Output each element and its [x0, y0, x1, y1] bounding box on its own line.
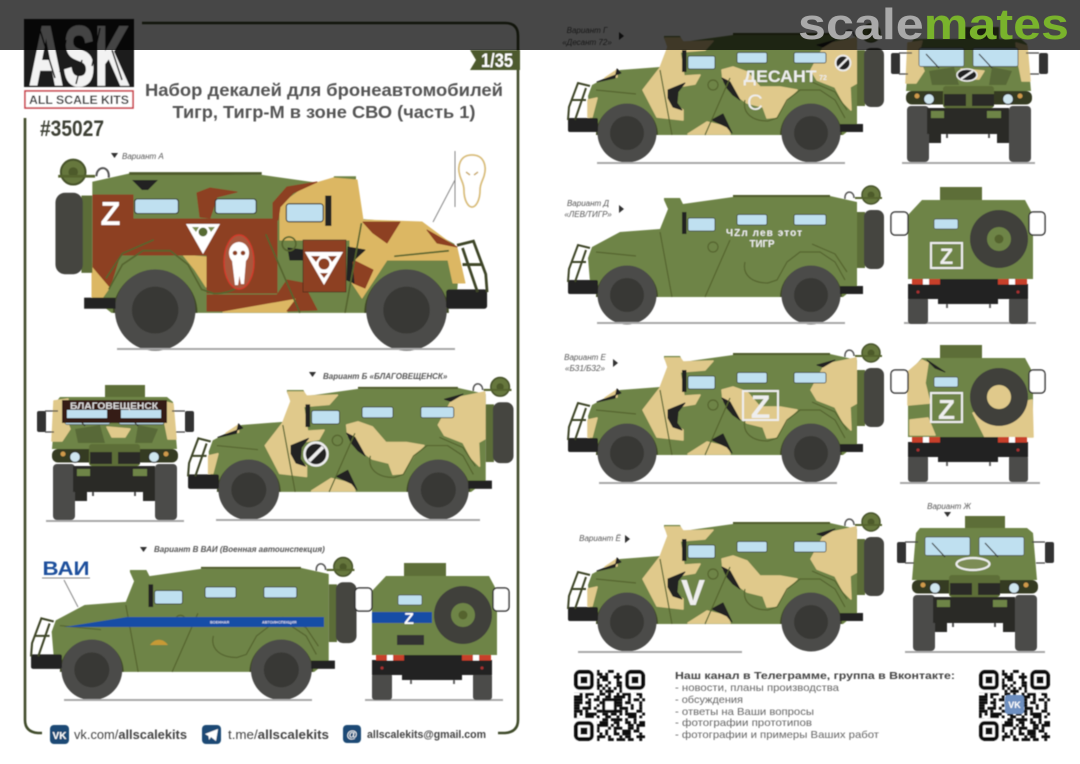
- rear Z box D: Z: [940, 244, 953, 269]
- vehicle: variant A side view: [55, 160, 487, 351]
- emblem Z: Z: [100, 195, 121, 232]
- text block: telegram channel info: Наш канал в Телеграмме, группа в Вконтакте:: [675, 670, 955, 682]
- variant E label: [564, 353, 618, 373]
- blue stripe: [64, 617, 324, 627]
- variant D label: Вариант Д: [567, 199, 609, 208]
- icon: email: [343, 725, 361, 743]
- vehicle: variant E side: [568, 344, 884, 482]
- text block: telegram channel info: [675, 670, 955, 741]
- ground lines D: [597, 322, 1036, 324]
- icon: email: @: [347, 729, 358, 741]
- email address: allscalekits@gmail.com: [367, 729, 486, 741]
- variant ZH label: Вариант Ж: [927, 502, 972, 511]
- sign: Blagoveshchensk: [62, 400, 167, 423]
- variant D label: «ЛЕВ/ТИГР»: [564, 210, 612, 219]
- marking V: V: [681, 572, 705, 613]
- variant ZH label: [927, 502, 972, 517]
- rear blue stripe: [372, 612, 432, 623]
- text block: telegram channel info: - фотографии и примеры Ваших работ: [675, 729, 879, 741]
- markings G: 72: [819, 75, 827, 82]
- text block: telegram channel info: - новости, планы производства: [675, 682, 839, 694]
- rear Z box E: [931, 393, 962, 425]
- top watermark band: [0, 0, 1080, 50]
- logo: ASK All Scale Kits: ALL SCALE KITS: [29, 95, 129, 107]
- black camo spots: [288, 247, 365, 283]
- variant YO label: Вариант Ё: [579, 534, 622, 543]
- icon: VK: [50, 725, 69, 744]
- variant V label: Вариант В ВАИ (Военная автоинспекция): [154, 545, 325, 554]
- vehicle: variant V side: [31, 558, 357, 700]
- marking Z box E: [743, 389, 778, 425]
- icon: VK: VK: [53, 731, 67, 742]
- logo: ASK All Scale Kits: [24, 9, 134, 108]
- sign: Blagoveshchensk: БЛАГОВЕЩЕНСК: [70, 401, 158, 412]
- markings G: [744, 56, 850, 115]
- rear Z box D: [931, 243, 962, 269]
- variant A label: Вариант А: [122, 152, 164, 161]
- marking D text: ЧZл лев этот: [726, 228, 802, 239]
- telegram link: t.me/allscalekits: [228, 727, 329, 742]
- vehicle: variant ZH front: [897, 516, 1054, 651]
- callout: skull decal detail: [433, 151, 485, 222]
- roof emblem black: [132, 180, 158, 190]
- marking D text: ТИГР: [750, 239, 775, 250]
- stripe text: ВОЕННАЯ: [210, 620, 229, 624]
- variant G label: Вариант Г: [567, 26, 608, 35]
- title: Тигр, Тигр-М в зоне СВО (часть 1): [172, 102, 476, 122]
- variant E label: Вариант Е: [564, 353, 607, 362]
- white oval emblem: [956, 558, 990, 570]
- variant G label: [562, 26, 624, 47]
- variant B label: Вариант Б «БЛАГОВЕЩЕНСК»: [323, 372, 448, 381]
- tan spare hub: [987, 385, 1011, 409]
- triangle emblem two: [305, 252, 343, 285]
- ground lines G: [597, 162, 1035, 164]
- ground lines YO: [578, 651, 1045, 653]
- qr code right with VK badge: VK: [1008, 700, 1021, 710]
- qr code left: [574, 670, 645, 741]
- ground lines B: [46, 520, 480, 521]
- rust panels: [93, 182, 457, 311]
- plate: [397, 635, 424, 645]
- vehicle: variant G side: [568, 24, 884, 162]
- scalemates watermark: scale mates: [798, 0, 1069, 49]
- crossed oval mark: [957, 69, 977, 81]
- ground line A: [117, 348, 455, 350]
- stripe text: [210, 620, 297, 624]
- title: Набор декалей для бронеавтомобилей: [145, 80, 503, 100]
- rear and mid tan patches: [92, 255, 297, 312]
- vehicle: variant D side: [568, 186, 884, 324]
- marking Z box E: Z: [751, 389, 770, 425]
- variant E label: «БЗ1/БЗ2»: [565, 364, 606, 373]
- icon: telegram: [202, 725, 221, 744]
- variant G label: «Десант 72»: [562, 38, 612, 47]
- text block: telegram channel info: - обсуждения: [675, 694, 743, 706]
- marking D text: [726, 228, 802, 250]
- variant D label: [564, 199, 624, 219]
- rear Z: Z: [404, 611, 414, 628]
- vehicle: variant B side: [188, 378, 514, 520]
- vehicle: variant G front: [891, 27, 1048, 162]
- tan hood camo: [280, 178, 465, 298]
- vehicle: variant YO side: [568, 513, 884, 652]
- callout: VAI: ВАИ: [42, 559, 90, 580]
- vehicle: variant V rear: [355, 563, 509, 700]
- text block: telegram channel info: - ответы на Ваши вопросы: [675, 706, 814, 718]
- marking: crossed circle B: [304, 442, 328, 466]
- rear Z box E: Z: [938, 394, 955, 425]
- frame border: [25, 23, 518, 733]
- qr code right with VK badge: [979, 670, 1050, 741]
- product number: #35027: [40, 116, 104, 141]
- vk link: vk.com/allscalekits: [74, 727, 187, 742]
- ground lines V: [64, 699, 503, 701]
- emblem: [150, 640, 168, 645]
- stripe text: АВТОИНСПЕКЦИЯ: [262, 620, 297, 624]
- logo: ASK All Scale Kits: ASK: [29, 9, 129, 103]
- contacts row: [50, 725, 486, 744]
- vehicle: variant E rear: [891, 345, 1045, 482]
- title: [145, 80, 503, 122]
- callout: VAI: [42, 559, 90, 607]
- markings G: С: [747, 90, 763, 115]
- door panel front: [303, 240, 346, 292]
- vehicle: variant B front: [37, 385, 194, 520]
- scale tag 1/35: 1/35: [481, 51, 513, 72]
- vehicle: variant D rear: [891, 187, 1045, 324]
- skull emblem: [224, 235, 254, 289]
- triangle emblem one: [186, 224, 220, 254]
- ground lines E: [599, 482, 1040, 484]
- text block: telegram channel info: - фотографии прототипов: [675, 717, 812, 729]
- markings G: ДЕСАНТ: [744, 67, 817, 86]
